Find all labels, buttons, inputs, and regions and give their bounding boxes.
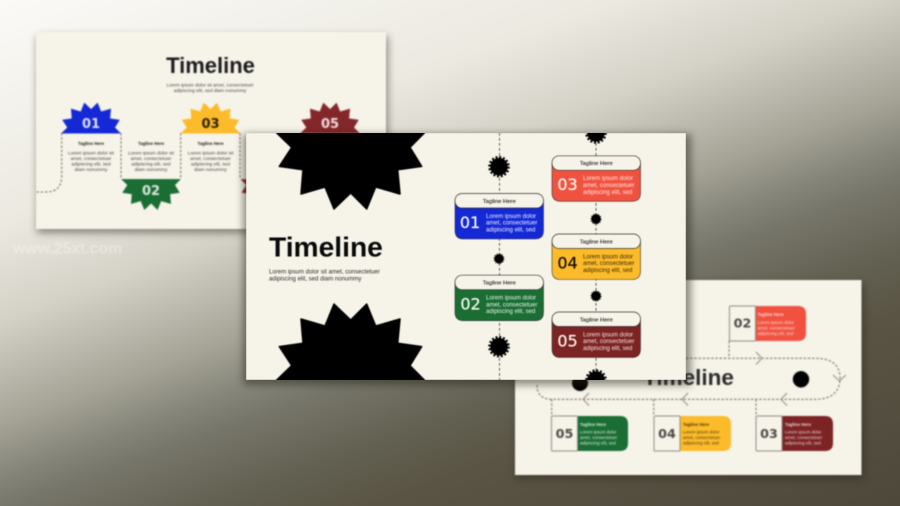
card: 04: 04 [658,426,676,441]
icon: burst node right top [584,133,608,144]
card: 04: Tagline Here [580,239,614,245]
icon: burst 03 [181,103,240,133]
card: 05: amet, consectetuer [583,339,634,345]
icon: dot left [572,375,588,391]
icon: burst node middle [494,254,504,264]
card: 04: amet, consectetuer [683,435,721,440]
card: 03: 03 [557,175,578,194]
card: 04: amet, consectetuer [583,261,634,267]
card: 03: adipiscing elit, sed [785,440,821,446]
text block: intro: Lorem ipsum dolor sit amet, consectetuer [269,270,380,276]
card: 01: Lorem ipsum dolor [486,214,536,220]
card: 03: Lorem ipsum dolor [583,176,633,182]
card: 02 [455,275,544,321]
icon: burst 05 [300,103,360,133]
card: 05 [552,312,640,358]
card: 05: Tagline Here [580,317,614,323]
icon: dot right [793,371,809,387]
icon: burst 02 [121,179,181,210]
text block: column 03: adipiscing elit, sed [191,162,230,168]
card: 03: adipiscing elit, sed [583,190,632,196]
card: 03 [756,416,833,451]
card: 01: 01 [460,213,480,232]
text block: column 03 [188,141,234,173]
card: 02: adipiscing elit, sed [758,331,794,336]
icon: burst 05: 05 [321,117,339,132]
card: 05: 05 [557,331,578,350]
card: 05: adipiscing elit, sed [580,440,616,446]
card: 04: Tagline Here [683,422,710,427]
card: 02: Tagline Here [758,312,784,317]
panel: back slide bottom right [515,280,864,479]
watermark: www.25xt.com [12,240,122,258]
icon: burst node right upper [591,214,601,224]
panel: front slide [246,123,686,390]
card: 01: Tagline Here [483,199,517,205]
card: 05: amet, consectetuer [580,435,618,440]
text block: column 03: diam nonummy [194,167,227,173]
text block: column 01: adipiscing elit, sed [71,162,111,168]
card: 05 [552,416,628,451]
card: 02: adipiscing elit, sed [486,309,535,315]
dashed flow path [537,341,840,416]
card: 04 [552,234,640,280]
card: 03: Tagline Here [785,422,812,427]
icon: burst 01: 01 [82,117,100,132]
icon: large burst bottom [277,304,424,380]
card: 05: Lorem ipsum dolor [583,332,633,338]
card: 02: Lorem ipsum dolor [758,320,794,325]
text block: column 01 [68,141,115,173]
card: 05: 05 [556,426,573,441]
card: 03: Tagline Here [580,161,614,167]
card: 04: adipiscing elit, sed [583,268,632,274]
icon: burst node right bottom [584,368,608,380]
heading: back slide title: Timeline [643,365,734,390]
icon: burst node upper [489,157,509,176]
text block: column 01: Tagline Here [78,141,105,146]
icon: burst 01 [61,103,121,133]
text block: back slide intro [166,82,254,94]
text block: back slide intro: Lorem ipsum dolor sit amet, consectetuer [166,82,254,88]
card: 03: Lorem ipsum dolor [785,430,822,434]
icon: large burst top [277,133,424,209]
text block: column 03: Tagline Here [197,141,224,146]
card: 02: amet, consectetuer [486,302,537,308]
card: 04: 04 [557,253,578,272]
card: 04: Lorem ipsum dolor [583,254,633,260]
card: 03: amet, consectetuer [785,435,823,440]
text block: column 02 [128,141,175,173]
text block: column 01: amet, consectetuer [71,156,112,162]
icon: burst 04 [240,179,300,210]
text block: intro [269,270,380,283]
card: 01: amet, consectetuer [486,221,537,227]
card: 02: 02 [460,295,481,314]
card: 04: Lorem ipsum dolor [683,430,720,434]
text block: column 03: amet, consectetuer [190,156,231,162]
icon: burst 03: 03 [201,117,220,132]
text block: back slide intro: adipiscing elit, sed diam nonummy [174,88,247,94]
heading: back slide title: Timeline [166,53,255,78]
text block: column 01: Lorem ipsum dolor sit [68,150,115,156]
icon: burst node right lower [591,291,601,301]
arrows [583,352,846,406]
text block: column 01: diam nonummy [75,167,108,173]
card: 05: Tagline Here [580,422,607,427]
text block: column 03: Lorem ipsum dolor sit [188,150,234,156]
timeline dashed lines [500,133,596,380]
card: 01 [455,194,544,239]
front slide shadow [243,134,691,385]
dashed path [36,133,240,192]
text block: column 02: Lorem ipsum dolor sit [128,150,175,156]
card: 02: amet, consectetuer [758,326,795,330]
card: 04 [654,416,731,451]
card: 01: adipiscing elit, sed [486,228,535,234]
card: 05: adipiscing elit, sed [583,346,632,352]
text block: column 02: Tagline Here [138,141,165,146]
heading: main title: Timeline [269,230,383,262]
card: 02: 02 [734,316,751,330]
panel: back slide top left [36,32,388,233]
card: 02: Tagline Here [483,281,517,287]
text block: intro: adipiscing elit, sed diam nonummy [269,277,362,283]
text block: column 02: adipiscing elit, sed [131,162,171,168]
card: 02 [730,306,806,341]
card: 03: 03 [760,426,778,441]
icon: burst 02: 02 [142,184,160,199]
card: 03: amet, consectetuer [583,183,634,189]
card: 03 [552,156,640,201]
card: 05: Lorem ipsum dolor [580,430,617,434]
icon: burst node lower [489,337,509,356]
card: 04: adipiscing elit, sed [683,440,719,446]
text block: column 02: amet, consectetuer [131,156,172,162]
card: 02: Lorem ipsum dolor [486,296,536,302]
text block: column 02: diam nonummy [135,167,168,173]
